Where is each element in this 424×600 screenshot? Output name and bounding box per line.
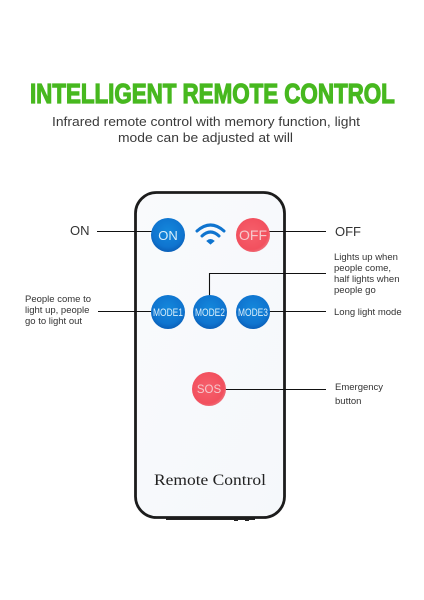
label: mode 1 description: light up, people [25,305,89,316]
label: SOS description [335,382,383,407]
subtitle [52,114,360,145]
button: ON [151,218,185,252]
remote control body [136,192,284,521]
button: MODE3: MODE3 [238,307,268,319]
button: SOS [192,372,226,406]
label: mode 2 description [334,252,399,296]
label: mode 3 description: Long light mode [334,307,402,318]
leader lines [97,232,326,390]
button: MODE2 [193,295,227,329]
button: MODE1 [151,295,185,329]
label: ON: ON [70,223,90,238]
label: SOS description: Emergency [335,382,383,393]
button: MODE2: MODE2 [195,307,225,319]
label: SOS description: button [335,396,361,407]
label: mode 2 description: people go [334,285,376,296]
label: mode 2 description: people come, [334,263,391,274]
button: OFF [236,218,270,252]
label: mode 2 description: Lights up when [334,252,398,263]
button: MODE1: MODE1 [153,307,183,319]
subtitle: Infrared remote control with memory function, light [52,114,360,129]
subtitle: mode can be adjusted at will [118,130,293,145]
title: INTELLIGENT REMOTE CONTROL [30,79,395,110]
remote label: Remote Control [154,472,267,489]
label: mode 2 description: half lights when [334,274,399,285]
label: mode 1 description: People come to [25,294,91,305]
label: mode 1 description [25,294,91,327]
button: SOS: SOS [197,384,221,396]
button: ON: ON [158,228,178,243]
icon: wifi [197,225,224,244]
button: MODE3 [236,295,270,329]
label: mode 1 description: go to light out [25,316,82,327]
label: OFF: OFF [335,224,361,239]
button: OFF: OFF [239,227,267,243]
